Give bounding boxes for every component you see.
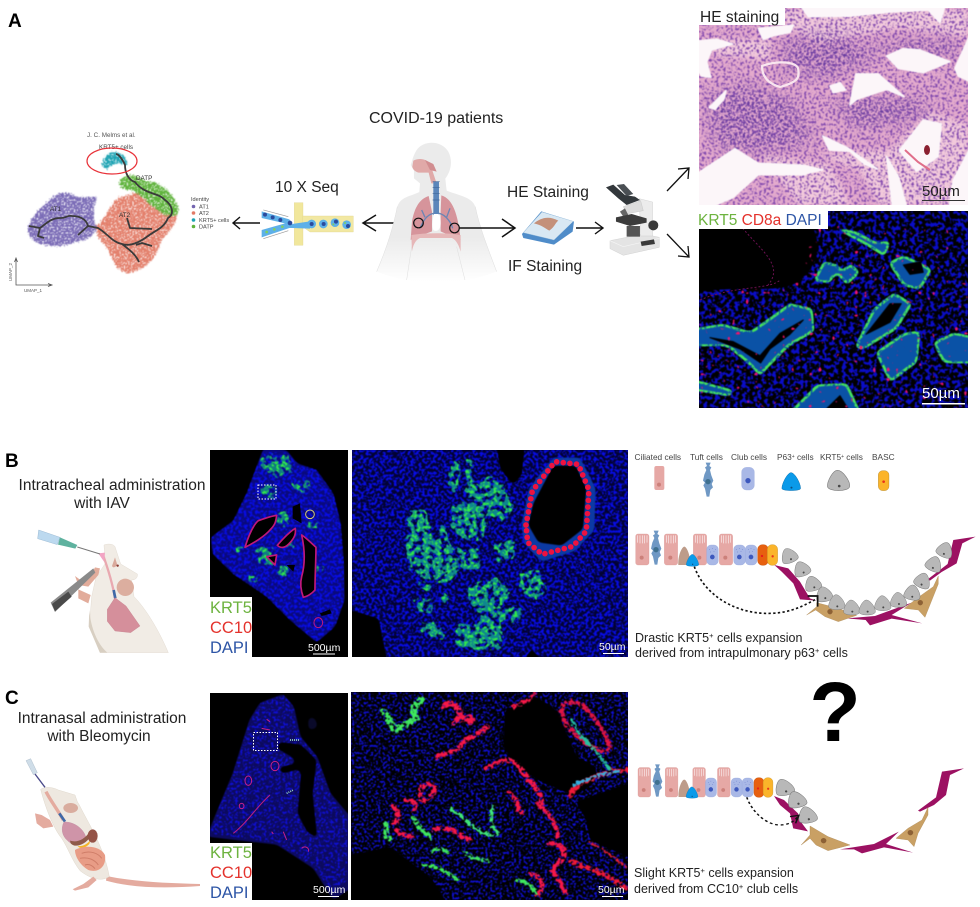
heading: intranasal administration <box>18 710 186 745</box>
diagram: KRT5 cell expansion after IAV <box>636 531 976 625</box>
caption: slight expansion <box>634 866 798 896</box>
chart: UMAP of lung cells: J. C. Melms et al. <box>87 132 136 139</box>
umap legend: DATP <box>199 224 214 230</box>
inset box <box>254 732 278 750</box>
caption: drastic expansion: cells expansion <box>713 631 802 645</box>
scale bar: 50 µm B: 50µm <box>599 641 626 653</box>
caption: slight expansion: derived from CC10 <box>634 882 739 896</box>
legend: cell types: cells <box>844 452 863 462</box>
heading: HE Staining: HE Staining <box>507 184 589 201</box>
caption: slight expansion: + <box>739 882 744 891</box>
legend: cell types: + <box>792 454 795 460</box>
red structures C <box>394 694 630 895</box>
marker: right lung circle <box>450 223 459 233</box>
legend: KRT5 CC10 DAPI B <box>209 597 252 657</box>
heading: intranasal administration: with Bleomycin <box>46 728 151 745</box>
green clusters B <box>407 458 548 652</box>
legend: KRT5 CC10 DAPI C <box>209 843 252 902</box>
green structures C <box>384 700 618 893</box>
umap legend <box>191 197 229 230</box>
arrow: patient to 10X <box>363 215 414 231</box>
heading: IF Staining: IF Staining <box>508 258 582 275</box>
blood in vessel <box>924 145 930 155</box>
legend: cell types: P63 <box>777 452 792 462</box>
panel label B: B <box>5 451 19 472</box>
caption: drastic expansion: + <box>709 631 714 640</box>
caption: slight expansion: + <box>700 866 705 875</box>
legend: cell types: Ciliated cells <box>634 452 681 462</box>
umap legend: KRT5+ cells <box>199 218 229 224</box>
panel label A: A <box>8 11 22 32</box>
light pink connective tissue <box>700 10 968 205</box>
heading: intratracheal administration <box>19 477 205 512</box>
umap axes: UMAP_2 <box>8 262 13 281</box>
arrow: to HE image <box>667 168 689 191</box>
caption: drastic expansion: Drastic KRT5 <box>635 631 709 645</box>
caption: slight expansion: club cells <box>743 882 798 896</box>
umap axes <box>8 258 52 293</box>
chart: UMAP of lung cells: AT1 <box>50 206 62 213</box>
diagram: slight KRT5 cell expansion after bleomycin <box>638 764 964 853</box>
icon: human torso with lungs <box>377 143 497 282</box>
marker: left lung circle <box>414 218 423 228</box>
airway B <box>522 458 596 562</box>
red highlight ellipse <box>87 148 137 174</box>
legend: cell types: + <box>841 454 844 460</box>
legend: KRT5 CC10 DAPI B: DAPI <box>210 639 249 657</box>
icon: microscope <box>606 184 659 255</box>
scale bar: IF: 50µm <box>922 385 960 402</box>
caption: drastic expansion: + <box>815 646 820 655</box>
caption: drastic expansion <box>635 631 848 660</box>
image label: KRT5 CD8a DAPI: KRT5 CD8a DAPI <box>698 212 822 229</box>
image label: HE staining: HE staining <box>700 9 779 26</box>
umap legend: AT2 <box>199 211 209 217</box>
icon: microfluidic chip <box>262 203 353 245</box>
legend: cell types <box>634 452 895 497</box>
caption: slight expansion: Slight KRT5 <box>634 866 700 880</box>
heading: 10 X Seq: 10 X Seq <box>275 179 339 196</box>
illustration: mouse with intratracheal injection <box>38 530 168 653</box>
arrow: patient to staining <box>459 219 515 237</box>
image: IF KRT5 CD8a DAPI <box>699 211 968 408</box>
image: lung section B <box>209 448 349 657</box>
arrow: to IF image <box>667 234 689 257</box>
umap axes: UMAP_1 <box>24 288 43 293</box>
image: zoomed tissue B <box>345 445 628 665</box>
umap legend: AT1 <box>199 204 209 210</box>
legend: cell types: Tuft cells <box>690 452 723 462</box>
ring gland <box>762 62 799 87</box>
legend: KRT5 CC10 DAPI C: KRT5 <box>210 844 252 862</box>
caption: drastic expansion: derived from intrapulmonary p63 <box>635 646 815 660</box>
inset box <box>258 485 276 499</box>
image: HE staining micrograph <box>699 8 968 205</box>
scale bar: 50 µm C: 50µm <box>598 884 625 896</box>
heading: intranasal administration: Intranasal administration <box>18 710 186 727</box>
question mark: ? <box>809 665 861 759</box>
image: lung section C <box>207 693 353 900</box>
arrow: slide to microscope <box>576 222 603 234</box>
legend: cell types: KRT5 <box>820 452 841 462</box>
image: zoomed tissue C <box>342 692 638 907</box>
legend: KRT5 CC10 DAPI B: KRT5 <box>210 599 252 617</box>
icon: tissue slide <box>522 211 574 245</box>
heading: intratracheal administration: with IAV <box>73 495 131 512</box>
legend: cell types: Club cells <box>731 452 767 462</box>
arrow: to UMAP <box>233 217 260 229</box>
myofibroblast cells <box>774 565 817 601</box>
chart: UMAP of lung cells: KRT5+ cells <box>99 144 133 151</box>
chart: UMAP of lung cells: AT2 <box>119 212 131 219</box>
legend: KRT5 CC10 DAPI C: CC10 <box>210 864 252 882</box>
scale bar: 500 µm B: 500µm <box>308 642 341 654</box>
lung fill <box>211 448 345 643</box>
heading: intratracheal administration: Intratracheal administration <box>19 477 205 494</box>
caption: slight expansion: cells expansion <box>705 866 794 880</box>
heading: COVID-19 patients: COVID-19 patients <box>369 110 503 127</box>
umap legend: Identity <box>191 197 209 203</box>
scale bar: 500 µm C: 500µm <box>313 884 346 896</box>
white lumens <box>699 8 968 205</box>
illustration: mouse with intranasal bleomycin <box>26 759 200 891</box>
caption: drastic expansion: cells <box>819 646 848 660</box>
chart: UMAP of lung cells: DATP <box>136 175 152 182</box>
legend: KRT5 CC10 DAPI B: CC10 <box>210 619 252 637</box>
chart: UMAP of lung cells <box>8 132 229 293</box>
scale bar: HE: 50µm <box>922 183 960 200</box>
legend: KRT5 CC10 DAPI C: DAPI <box>210 884 249 902</box>
legend: cell types: BASC <box>872 452 895 462</box>
panel label C: C <box>5 688 19 709</box>
legend: cell types: cells <box>795 452 814 462</box>
